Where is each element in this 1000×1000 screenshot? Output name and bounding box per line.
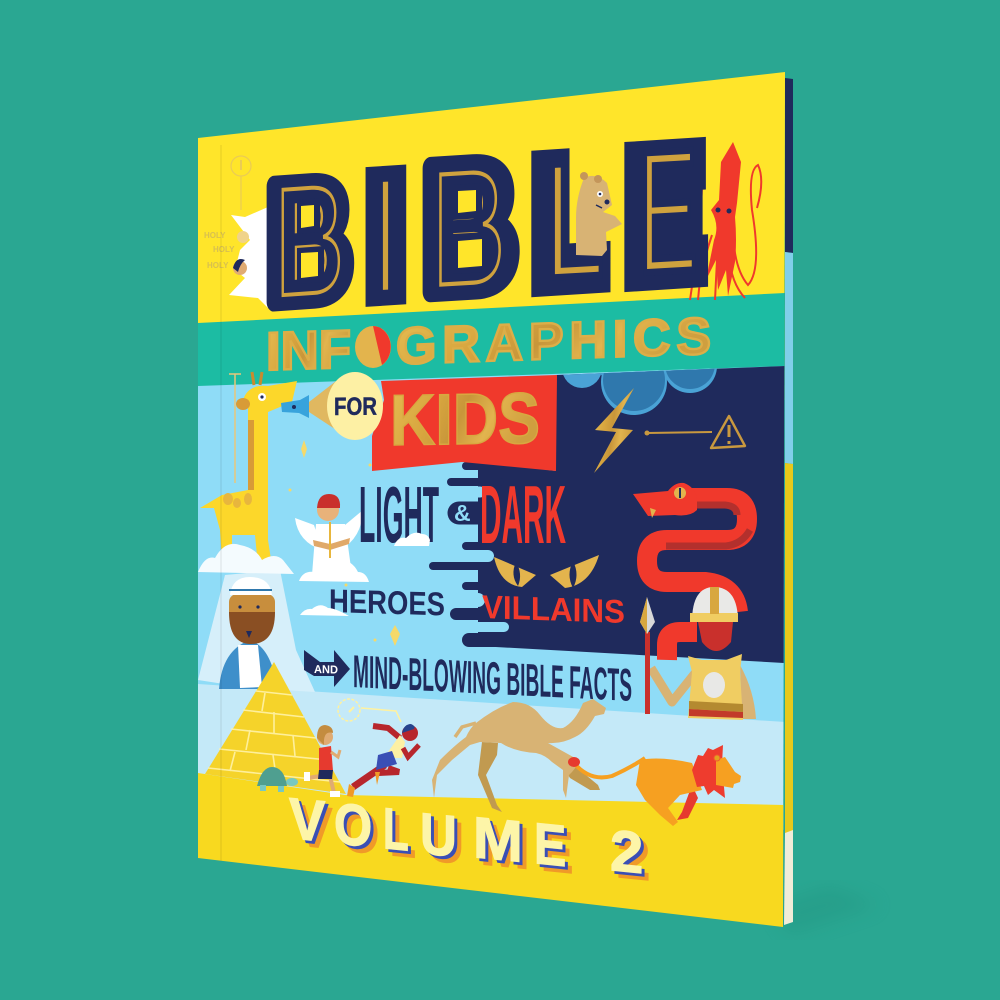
lighter lower band [198, 684, 785, 830]
storm cloud [563, 368, 717, 415]
holy holy holy text [204, 231, 235, 270]
letter L: L [535, 127, 603, 316]
turtle [257, 767, 298, 792]
letter E: E [638, 114, 697, 311]
snake head [633, 483, 697, 518]
small cloud by HEROES [300, 605, 349, 616]
angels behind B [229, 207, 268, 308]
lamp icon top left [231, 156, 251, 210]
giraffe [200, 372, 297, 566]
FOR text: FOR [334, 393, 377, 421]
INFOGRAPHICS title [266, 308, 711, 382]
letter U: U [427, 807, 464, 876]
letter V: V [289, 785, 326, 854]
letter B second: B [422, 124, 518, 331]
holy holy holy text: HOLY [204, 231, 226, 240]
spine crease [220, 145, 222, 861]
soldier [651, 587, 756, 720]
letter E: E [628, 119, 701, 312]
numeral 2: 2 [610, 817, 643, 886]
stars [288, 440, 400, 646]
INF letters: INF [266, 319, 351, 382]
pyramid [205, 662, 346, 794]
sprinter [347, 724, 419, 797]
numeral 2: 2 [617, 824, 650, 893]
small cloud over LIGHT [394, 533, 430, 546]
book shadow [770, 885, 880, 935]
sky background [198, 360, 785, 730]
letter V: V [292, 788, 329, 857]
letter U: U [420, 800, 457, 869]
letter L: L [386, 798, 412, 866]
clouds by giraffe [198, 544, 294, 574]
letter V: V [296, 792, 333, 861]
flashlight [281, 372, 383, 440]
BIBLE letters [266, 114, 701, 338]
lion [568, 745, 741, 826]
KIDS text: KIDS [390, 379, 540, 461]
camel [432, 699, 606, 812]
yellow bottom area [198, 773, 785, 930]
lightning bolt [594, 388, 634, 473]
AND small: AND [455, 597, 475, 610]
pie chart O [355, 326, 391, 368]
book cover [190, 60, 800, 930]
bear [576, 172, 622, 256]
letter U: U [423, 803, 460, 872]
yellow top area [190, 60, 800, 400]
book cover: DARK [480, 468, 566, 561]
spear [640, 597, 655, 714]
stopwatch [338, 699, 401, 722]
angel [295, 494, 369, 582]
letter O: O [334, 791, 372, 860]
boy running [304, 725, 340, 797]
holy holy holy text: HOLY [207, 261, 229, 270]
letter L: L [544, 126, 604, 313]
ampersand: & [454, 500, 471, 526]
letter E: E [534, 812, 566, 879]
letter I: I [380, 149, 391, 324]
squid [690, 142, 761, 300]
arrow with AND: AND [314, 664, 338, 676]
dark panel [433, 366, 785, 663]
letter L: L [390, 802, 416, 870]
teal band [198, 293, 785, 386]
red KIDS box [372, 375, 557, 471]
GRAPHICS letters: GRAPHICS [396, 308, 711, 376]
letter B first: B [277, 153, 343, 328]
aura behind Moses [198, 570, 315, 692]
VOLUME 2 lettering [289, 785, 650, 893]
letter L: L [383, 795, 409, 863]
book back cover edge [784, 78, 793, 925]
arrow with AND [304, 650, 350, 687]
letter O: O [341, 798, 379, 867]
snake [647, 498, 750, 665]
letter I: I [364, 138, 407, 334]
HEROES text: HEROES [329, 582, 445, 622]
letter B first: B [266, 144, 352, 338]
letter O: O [337, 794, 375, 863]
letter B second: B [434, 137, 504, 320]
Moses [219, 577, 277, 689]
letter E: E [537, 815, 569, 882]
holy holy holy text: HOLY [213, 245, 235, 254]
numeral 2: 2 [613, 820, 646, 889]
villain eyes [494, 555, 599, 588]
VILLAINS text: VILLAINS [482, 588, 625, 630]
warning sign with pointer [644, 416, 745, 448]
letter E: E [541, 819, 573, 886]
letter M: M [476, 807, 526, 878]
letter M: M [480, 811, 530, 882]
book cover: LIGHT [359, 470, 439, 559]
letter M: M [473, 804, 523, 875]
